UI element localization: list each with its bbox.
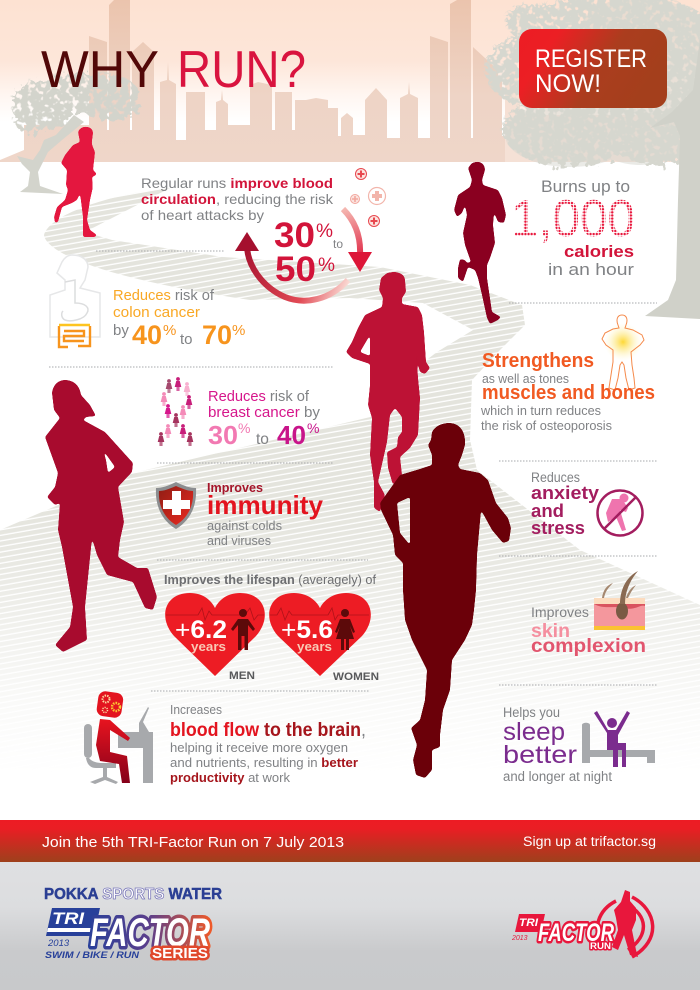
text: calories: in an hour	[548, 260, 634, 279]
text: blood flow to the brain: productivity at work	[170, 770, 290, 785]
icon: muscle man	[602, 315, 644, 390]
logo: Pokka Tri-Factor Series: POKKA SPORTS WATER	[44, 886, 222, 903]
text: blood flow to the brain: and nutrients, resulting in better	[170, 755, 358, 770]
heart: men: years	[191, 639, 226, 654]
stat: 30% to 50%: %	[318, 255, 335, 276]
text: strengthens: as well as tones	[482, 372, 569, 386]
medical plus icons	[350, 168, 386, 226]
icon: digestive system	[50, 255, 100, 347]
logo: Pokka Tri-Factor Series: SERIES	[152, 945, 208, 962]
logo: Pokka Tri-Factor Series: 2013	[47, 938, 70, 949]
circular arrows	[235, 209, 372, 301]
logo: Tri-Factor Run	[511, 890, 653, 957]
title: WHY	[41, 41, 159, 99]
text: strengthens: the risk of osteoporosis	[481, 418, 612, 433]
heart: men: +6.2	[175, 616, 227, 644]
stat: 30% to 50%: to	[333, 237, 343, 251]
text: blood circulation: circulation , reducing the risk	[141, 191, 334, 207]
logo: Tri-Factor Run: 2013	[511, 935, 528, 942]
icon: shield	[156, 482, 196, 529]
text: sleep better: and longer at night	[503, 769, 612, 784]
grey footer panel	[0, 862, 700, 990]
icon: bed and person	[582, 711, 655, 767]
register button: REGISTER	[535, 45, 647, 73]
text: immunity: Improves	[207, 481, 263, 495]
text: colon cancer: 40	[132, 320, 162, 350]
logo: Tri-Factor Run: RUN	[590, 941, 611, 952]
icon: desk worker	[84, 690, 153, 784]
text: anxiety and stress: anxiety	[531, 483, 599, 503]
text: colon cancer: 70	[202, 320, 232, 350]
logo: Pokka Tri-Factor Series: SWIM / BIKE / RUN	[45, 950, 140, 961]
heart: women: WOMEN	[333, 671, 379, 683]
heart: women: +5.6	[281, 616, 333, 644]
text: blood flow to the brain: helping it receive more oxygen	[170, 740, 348, 755]
text: blood flow to the brain: Increases	[170, 702, 222, 717]
register button: NOW!	[535, 70, 601, 98]
logo: Pokka Tri-Factor Series: FACTOR	[90, 911, 210, 955]
text: skin complexion: complexion	[531, 636, 646, 657]
text: immunity: immunity	[207, 490, 324, 520]
text: strengthens: muscles and bones	[482, 382, 655, 404]
red footer bar: Sign up at trifactor.sg	[523, 834, 656, 849]
text: blood flow to the brain: blood flow to the brain,	[170, 720, 366, 741]
text: immunity	[207, 481, 324, 548]
icon: ribbon of women	[158, 377, 193, 446]
text: calories: calories	[564, 242, 634, 261]
divider lines	[49, 251, 657, 691]
text: colon cancer: to	[180, 331, 193, 348]
text: skin complexion	[531, 605, 646, 657]
text: sleep better	[503, 705, 612, 784]
title: RUN?	[177, 41, 306, 99]
text: skin complexion: Improves	[531, 605, 589, 620]
heart: men	[165, 593, 265, 682]
text: calories	[511, 178, 635, 279]
heart: women	[269, 593, 379, 683]
text: anxiety and stress	[531, 470, 599, 538]
text: breast cancer: breast cancer by	[208, 405, 321, 421]
runner front	[380, 423, 511, 778]
runner center	[346, 272, 430, 512]
heart: women: years	[297, 639, 332, 654]
text: blood flow to the brain	[170, 702, 366, 785]
logo: Tri-Factor Run: FACTOR	[538, 919, 614, 947]
text: breast cancer: %	[238, 420, 250, 436]
text: colon cancer: Reduces risk of	[113, 287, 215, 304]
text: sleep better: sleep	[503, 718, 565, 746]
text: breast cancer: Reduces risk of	[208, 389, 310, 405]
text: colon cancer: %	[232, 322, 245, 339]
text: calories: Burns up to	[541, 178, 630, 196]
text: anxiety and stress: stress	[531, 518, 585, 538]
text: anxiety and stress: Reduces	[531, 470, 580, 485]
text: blood circulation: Regular runs improve blood	[141, 175, 333, 191]
logo: Tri-Factor Run: TRI	[519, 917, 539, 929]
stat: 30% to 50%	[274, 216, 343, 289]
text: anxiety and stress: and	[531, 501, 564, 521]
text: breast cancer	[208, 389, 321, 450]
text: blood circulation: of heart attacks by	[141, 207, 264, 223]
tree right	[485, 0, 700, 319]
text: sleep better: Helps you	[503, 705, 560, 720]
text: skin complexion: skin	[531, 621, 570, 642]
tree left	[12, 72, 140, 194]
text: calories: 1,000	[511, 190, 635, 248]
text: strengthens	[480, 350, 655, 433]
text: strengthens: Strengthens	[482, 350, 594, 372]
text: breast cancer: 40	[277, 420, 306, 450]
text: immunity: and viruses	[207, 533, 271, 548]
text: colon cancer: %	[163, 322, 176, 339]
red footer bar	[0, 820, 700, 862]
text: colon cancer: colon cancer	[113, 304, 200, 321]
text: breast cancer: %	[307, 420, 319, 436]
logo: Pokka Tri-Factor Series	[44, 886, 222, 962]
runner woman	[45, 380, 157, 652]
text: colon cancer	[113, 287, 245, 350]
winding road	[0, 188, 700, 691]
text: immunity: against colds	[207, 518, 282, 533]
text: breast cancer: to	[256, 431, 269, 448]
background sky	[0, 0, 700, 122]
title	[41, 41, 306, 99]
text: colon cancer: by	[113, 322, 129, 339]
icon: skin	[594, 571, 645, 630]
text: sleep better: better	[503, 741, 577, 769]
icon: no stress	[598, 490, 642, 536]
runner top right	[454, 162, 506, 324]
logo: Pokka Tri-Factor Series: TRI	[52, 909, 85, 928]
text: strengthens: which in turn reduces	[480, 403, 601, 418]
runner small top left	[54, 127, 97, 237]
text: blood circulation	[141, 175, 334, 223]
stat: 30% to 50%: %	[316, 221, 333, 242]
red footer bar: Join the 5th TRI-Factor Run on 7 July 2013	[42, 835, 344, 851]
register button	[519, 29, 667, 108]
stat: 30% to 50%: 30	[274, 216, 315, 255]
text: breast cancer: 30	[208, 420, 238, 450]
city skyline	[0, 0, 700, 162]
heart: men: MEN	[229, 670, 255, 682]
text: lifespan heading: Improves the lifespan (averagely) of	[164, 572, 376, 587]
stat: 30% to 50%: 50	[275, 250, 316, 289]
